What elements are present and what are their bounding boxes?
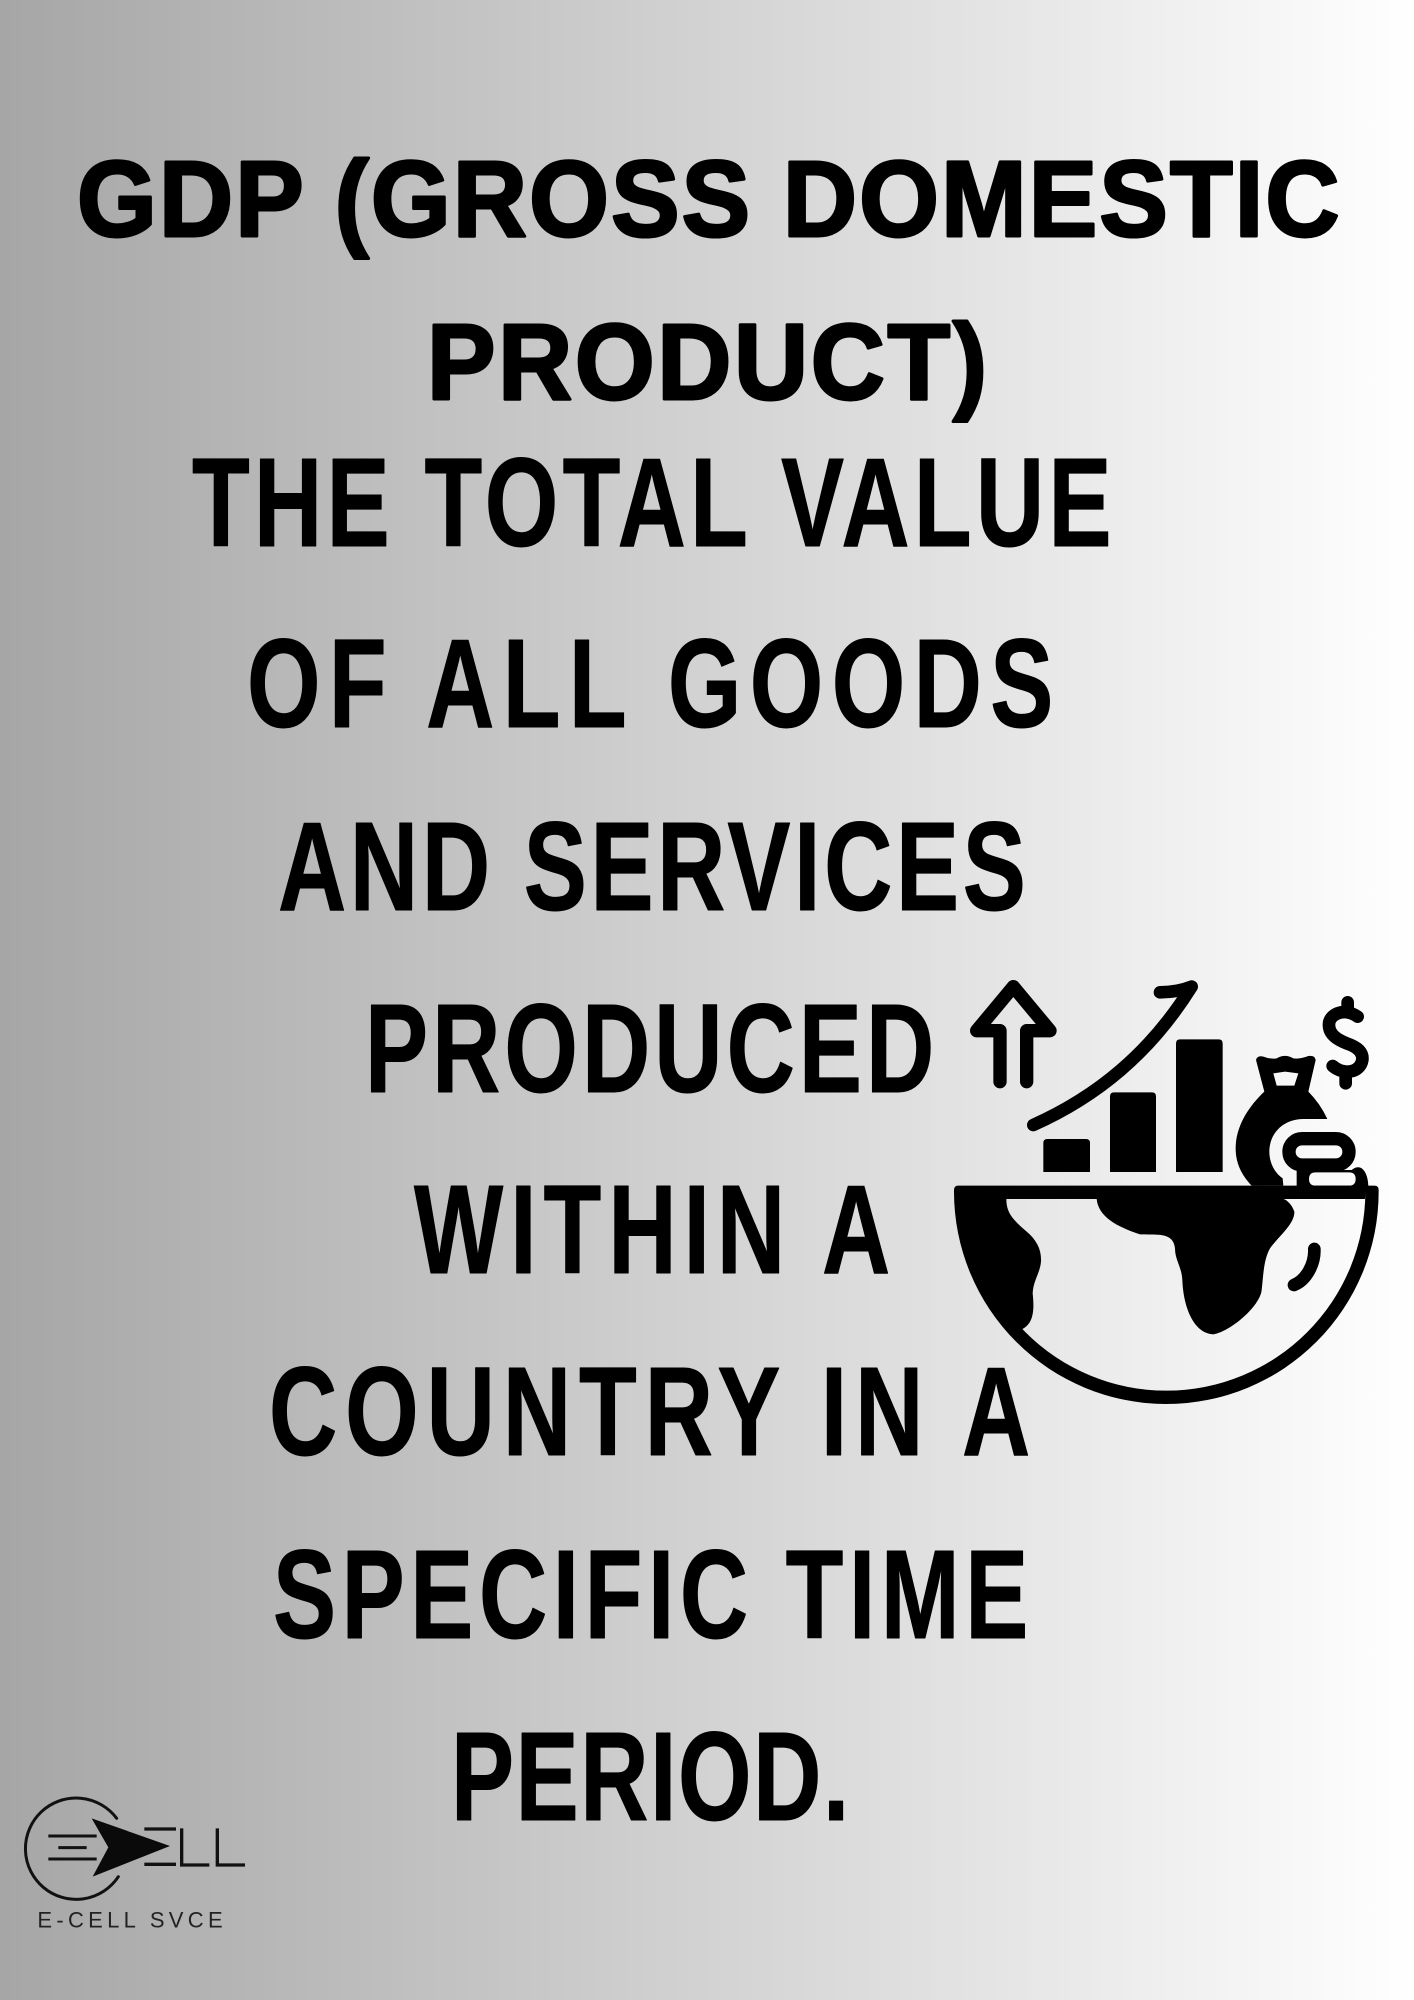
- definition text block: AND SERVICES: [278, 796, 1026, 937]
- definition text block: PERIOD.: [451, 1706, 849, 1847]
- definition text block: OF ALL GOODS: [247, 613, 1053, 754]
- icon: growth curve: [1033, 987, 1192, 1125]
- icon: global economy growth: [954, 987, 1379, 1404]
- icon: half globe: [954, 1186, 1379, 1404]
- definition text block: WITHIN A: [414, 1159, 890, 1300]
- logo: E-Cell SVCE: [25, 1798, 245, 1933]
- icon: money bag: [1236, 1056, 1327, 1186]
- definition text block: COUNTRY IN A: [269, 1341, 1030, 1482]
- title: PRODUCT): [427, 303, 987, 423]
- title: GDP (GROSS DOMESTIC: [77, 140, 1340, 260]
- definition text block: SPECIFIC TIME: [273, 1524, 1028, 1665]
- icon: coins: [1289, 1139, 1368, 1187]
- title: [77, 140, 1340, 423]
- icon: dollar sign: [1329, 1002, 1362, 1083]
- logo caption: E-CELL SVCE: [37, 1908, 223, 1933]
- definition text block: [192, 432, 1112, 1847]
- definition text block: THE TOTAL VALUE: [192, 432, 1112, 573]
- logo letters ELL: [144, 1828, 245, 1865]
- icon: up arrow: [977, 987, 1050, 1082]
- logo ring: [25, 1798, 118, 1899]
- logo speed lines: [48, 1836, 97, 1859]
- logo dart: [92, 1818, 170, 1877]
- icon: bar chart: [1043, 1039, 1223, 1172]
- definition text block: PRODUCED: [365, 978, 934, 1119]
